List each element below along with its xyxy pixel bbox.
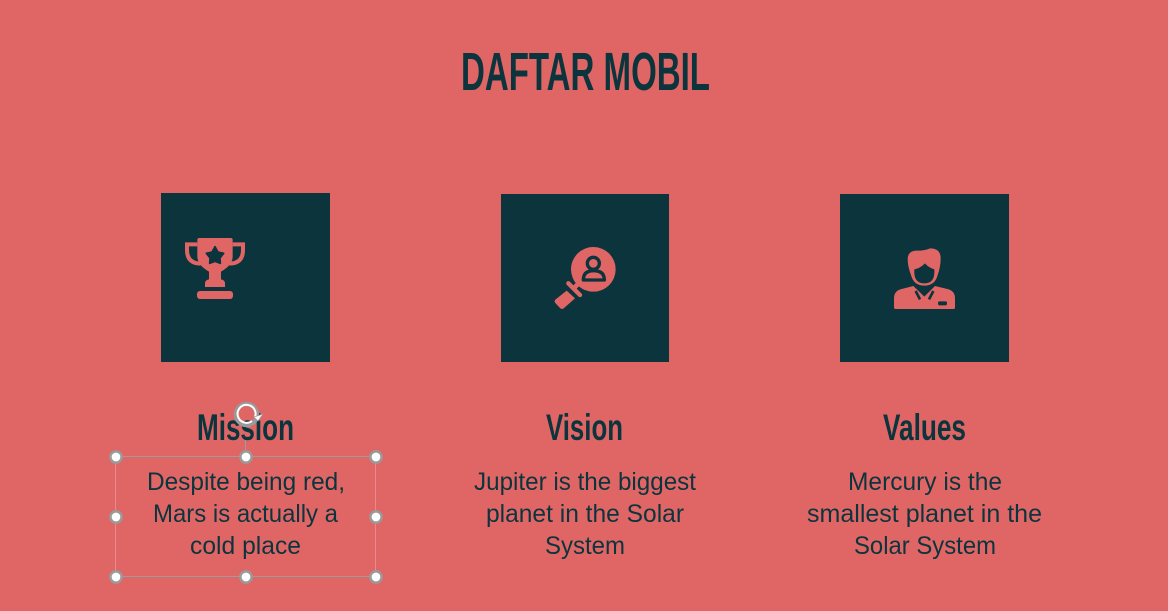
selection box with handles bbox=[110, 404, 382, 583]
icon: magnifier with person bbox=[555, 247, 616, 309]
vision icon tile bbox=[501, 194, 669, 362]
vision description: planet in the Solar bbox=[486, 500, 684, 528]
title: DAFTAR MOBIL bbox=[461, 42, 710, 102]
values description: Solar System bbox=[854, 532, 996, 560]
vision description bbox=[474, 468, 696, 560]
values heading: Values bbox=[883, 407, 966, 448]
values icon tile bbox=[840, 194, 1009, 362]
vision description: Jupiter is the biggest bbox=[474, 468, 696, 496]
mission description bbox=[147, 468, 345, 560]
mission description: Despite being red, bbox=[147, 468, 345, 496]
panel: values bbox=[807, 194, 1042, 560]
mission icon tile bbox=[161, 193, 330, 362]
values description bbox=[807, 468, 1042, 560]
mission description: cold place bbox=[190, 532, 301, 560]
vision heading: Vision bbox=[546, 407, 623, 448]
mission heading: Mission bbox=[197, 407, 294, 448]
icon: rotate handle bbox=[236, 404, 263, 425]
vision description: System bbox=[545, 532, 625, 560]
panel: vision bbox=[474, 194, 696, 560]
icon: trophy bbox=[187, 238, 243, 299]
values description: Mercury is the bbox=[848, 468, 1002, 496]
mission description: Mars is actually a bbox=[153, 500, 338, 528]
panel: mission bbox=[147, 193, 345, 560]
values description: smallest planet in the bbox=[807, 500, 1042, 528]
icon: person in uniform bbox=[894, 248, 955, 309]
